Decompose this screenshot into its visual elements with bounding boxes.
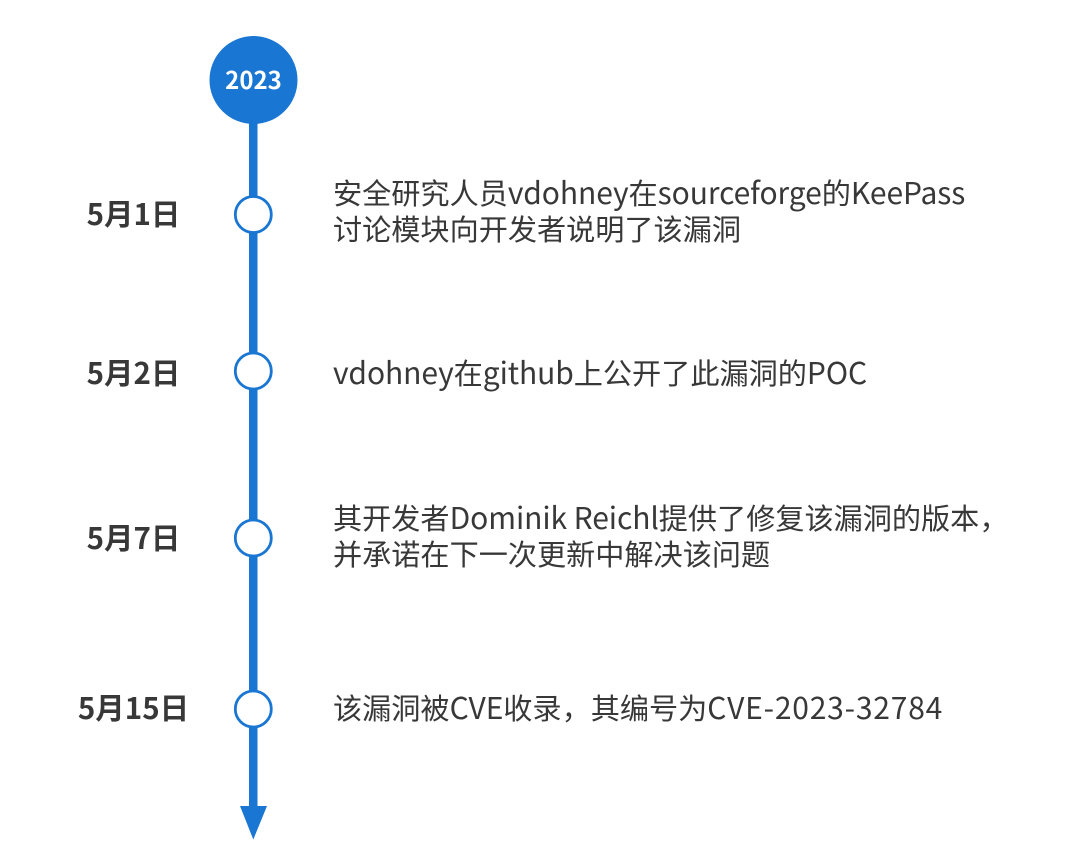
event text: May 15: 该漏洞被CVE收录，其编号为CVE-2023-32784 bbox=[333, 684, 943, 728]
date: May 7: 5月7日 bbox=[87, 516, 180, 558]
date: May 2: 5月2日 bbox=[87, 351, 180, 393]
node: May 1 bbox=[235, 196, 271, 232]
event text: May 7: 其开发者Dominik Reichl提供了修复该漏洞的版本， bbox=[333, 494, 1008, 538]
node: May 7 bbox=[235, 520, 271, 556]
vertical line bbox=[249, 110, 258, 812]
date: May 1: 5月1日 bbox=[87, 192, 180, 234]
event text: May 2: vdohney在github上公开了此漏洞的POC bbox=[333, 349, 867, 393]
date: May 15: 5月15日 bbox=[78, 686, 189, 728]
arrow head bbox=[240, 806, 267, 840]
event text: May 1: 安全研究人员vdohney在sourceforge的KeePass bbox=[333, 169, 965, 213]
year badge: 2023 bbox=[225, 61, 282, 96]
event text: May 1 bbox=[333, 169, 965, 249]
event text: May 7: 并承诺在下一次更新中解决该问题 bbox=[333, 532, 770, 574]
event text: May 7 bbox=[333, 494, 1008, 574]
event text: May 1: 讨论模块向开发者说明了该漏洞 bbox=[333, 207, 741, 249]
node: May 2 bbox=[235, 353, 271, 389]
year badge bbox=[210, 36, 298, 124]
node: May 15 bbox=[235, 691, 271, 727]
